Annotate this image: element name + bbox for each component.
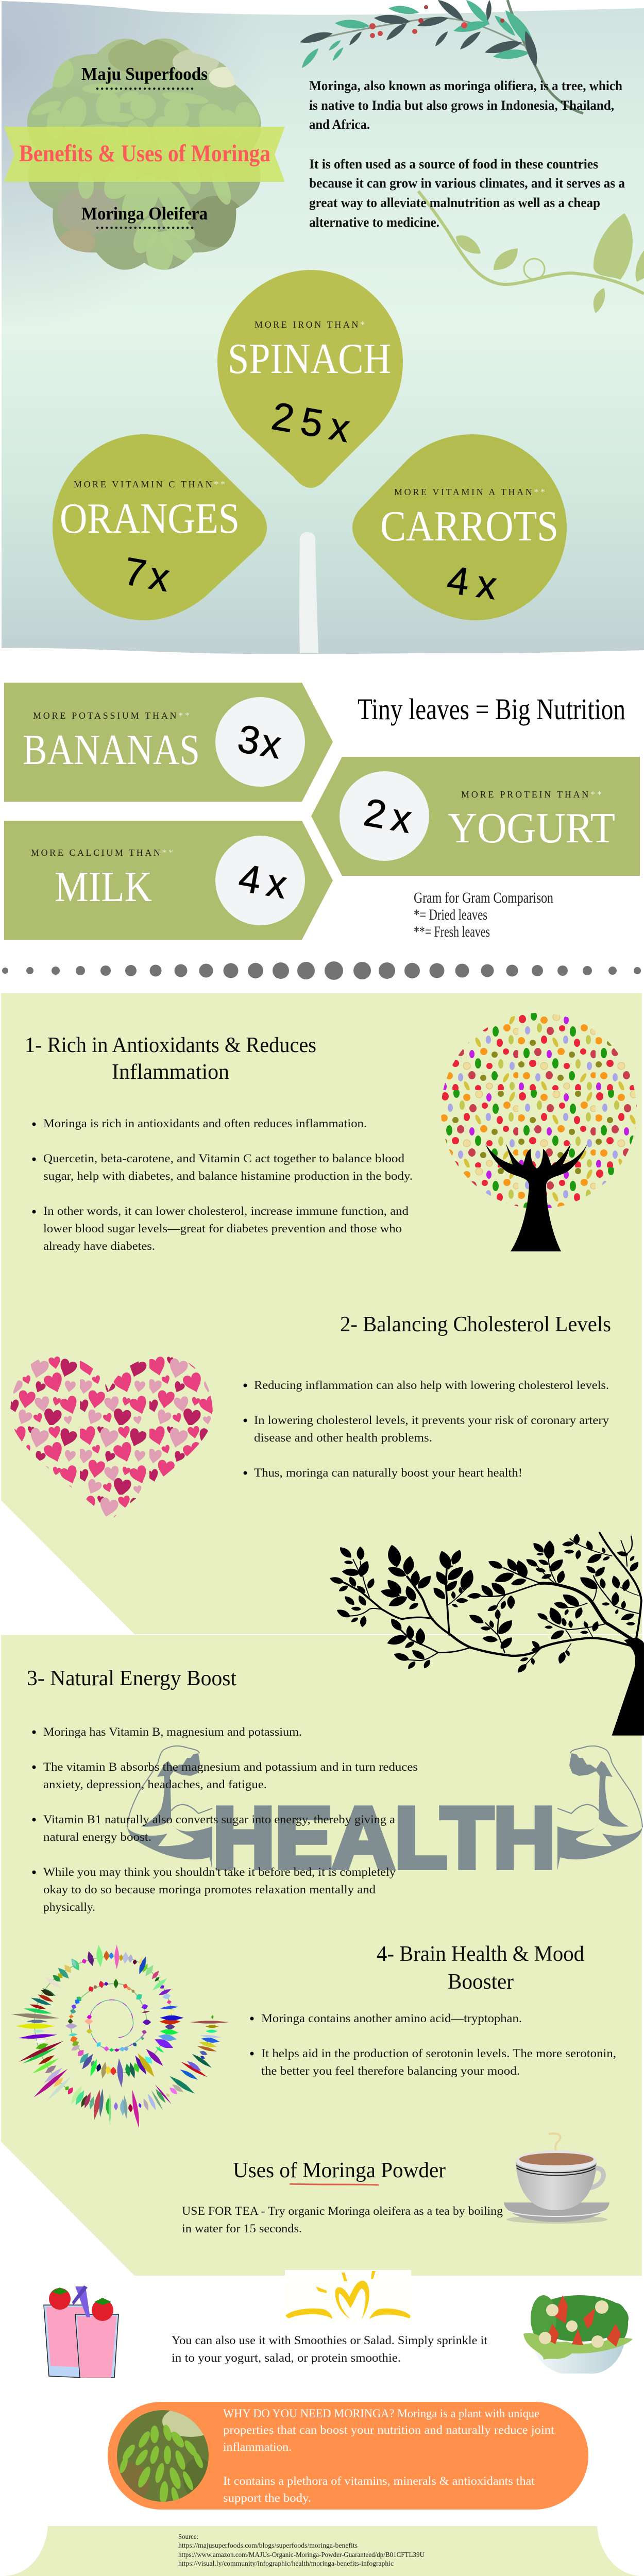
panel: hero background — [2, 1, 644, 654]
photo: moringa branch — [117, 2410, 209, 2502]
section 2 bullet list: In lowering cholesterol levels, it prevents your risk of coronary artery — [254, 1414, 609, 1427]
section 1 bullet list — [32, 1117, 413, 1252]
arrow card: milk — [4, 821, 333, 940]
section 2 bullet list: disease and other health problems. — [254, 1431, 432, 1444]
intro text — [309, 78, 625, 230]
icon: coffee cup — [504, 2133, 609, 2224]
section 3 bullet list: The vitamin B absorbs the magnesium and potassium and in turn reduces — [43, 1760, 418, 1773]
section 2 bullet list — [243, 1379, 609, 1479]
leaf: spinach — [217, 270, 403, 488]
leaf: spinach: MORE IRON THAN* — [255, 319, 365, 330]
arrow card: bananas: MORE POTASSIUM THAN** — [33, 710, 190, 721]
section 4 bullet list — [250, 2012, 616, 2077]
tea usage text: in water for 15 seconds. — [182, 2222, 302, 2235]
leaf: carrots — [352, 434, 567, 620]
section 4 bullet list: the better you feel therefore balancing your mood. — [261, 2064, 520, 2077]
callout text: inflammation. — [223, 2441, 292, 2453]
section 4 bullet list: It helps aid in the production of serotonin levels. The more serotonin, — [261, 2047, 616, 2060]
stem of clover — [299, 532, 318, 653]
section 1 bullet list: lower blood sugar levels—great for diabetes prevention and those who — [43, 1222, 402, 1235]
leaf: oranges: MORE VITAMIN C THAN** — [74, 479, 225, 489]
intro text: It is often used as a source of food in these countries — [309, 157, 598, 172]
callout text: It contains a plethora of vitamins, minerals & antioxidants that — [223, 2475, 535, 2487]
section 4 bullet list: Moringa contains another amino acid—tryptophan. — [261, 2012, 522, 2025]
footer: sources: https://visual.ly/community/infographic/health/moringa-benefits-infographic — [178, 2560, 394, 2568]
section 3 bullet list: physically. — [43, 1901, 95, 1913]
section 3 bullet list — [32, 1725, 418, 1913]
leaf: oranges: 7x — [121, 549, 173, 600]
section 4 heading — [377, 1942, 584, 1994]
arrow card: yogurt: YOGURT — [448, 804, 615, 852]
smoothie and salad usage text: in to your yogurt, salad, or protein smoothie. — [172, 2351, 401, 2364]
intro text: great way to alleviate malnutrition as well as a cheap — [309, 195, 600, 210]
intro text: and Africa. — [309, 117, 370, 132]
comparison legend: *= Dried leaves — [414, 906, 487, 923]
section 4 heading: 4- Brain Health & Mood — [377, 1942, 584, 1966]
arrow card: yogurt — [311, 757, 640, 876]
section 1 bullet list: In other words, it can lower cholesterol, increase immune function, and — [43, 1205, 409, 1217]
comparison legend: **= Fresh leaves — [414, 923, 490, 940]
section 1 heading — [25, 1033, 316, 1084]
callout text — [223, 2407, 555, 2504]
arrow card: milk: 4x — [235, 856, 290, 907]
panel: benefits 1 and 2 background — [1, 993, 642, 1634]
illustration: black tree silhouette — [329, 1533, 644, 1736]
leaf: spinach: SPINACH — [228, 335, 391, 383]
section 3 bullet list: While you may think you shouldn't take it before bed, it is completely — [43, 1866, 396, 1878]
callout text: support the body. — [223, 2492, 311, 2504]
section 2 bullet list: Thus, moringa can naturally boost your heart health! — [254, 1466, 522, 1479]
illustration: heart of hearts — [10, 1355, 213, 1520]
leaf: oranges — [53, 434, 267, 620]
arrow card: bananas: BANANAS — [23, 726, 200, 774]
section 3 bullet list: natural energy boost. — [43, 1831, 151, 1843]
arrow card: yogurt: MORE PROTEIN THAN** — [461, 789, 602, 800]
illustration: colourful spiral — [11, 1944, 229, 2129]
smoothie and salad usage text — [172, 2334, 488, 2364]
callout text: WHY DO YOU NEED MORINGA? Moringa is a plant with unique — [223, 2407, 539, 2420]
HEALTH wordmark: HEALTH — [213, 1789, 555, 1886]
intro text: Moringa, also known as moringa olifiera, is a tree, which — [309, 78, 623, 93]
illustration: fruit tree — [441, 1013, 637, 1251]
icon: smoothie glasses — [44, 2285, 118, 2378]
left flexed arm — [127, 1746, 212, 1870]
arrow card: yogurt: 2x — [361, 790, 415, 842]
section 1 bullet list: sugar, help with diabetes, and balance histamine production in the body. — [43, 1170, 413, 1182]
right flexed arm — [557, 1746, 642, 1870]
tea usage text: USE FOR TEA - Try organic Moringa oleifera as a tea by boiling — [182, 2205, 503, 2217]
tea usage text — [182, 2205, 503, 2235]
section 1 bullet list: already have diabetes. — [43, 1240, 155, 1252]
callout text: properties that can boost your nutrition and naturally reduce joint — [223, 2424, 555, 2436]
footer: sources: https://www.amazon.com/MAJUs-Organic-Moringa-Powder-Guaranteed/dp/B01CFTL39U — [178, 2551, 425, 2559]
section 2 bullet list: Reducing inflammation can also help with lowering cholesterol levels. — [254, 1379, 609, 1392]
logo: yellow sun heart — [285, 2270, 411, 2321]
main title: Benefits & Uses of Moringa — [19, 140, 270, 167]
leaf: carrots: 4x — [445, 558, 500, 608]
section 3 bullet list: Moringa has Vitamin B, magnesium and potassium. — [43, 1725, 302, 1738]
illustration: health arms and wordmark — [127, 1746, 642, 1886]
photo badge: moringa leaves — [27, 38, 262, 270]
intro text: alternative to medicine. — [309, 215, 439, 230]
comparison legend: Gram for Gram Comparison — [414, 889, 553, 906]
comparison legend — [414, 889, 553, 940]
arrow card: bananas — [4, 683, 333, 802]
arrow card: milk: MORE CALCIUM THAN** — [31, 848, 173, 858]
leaf: carrots: CARROTS — [380, 502, 558, 550]
footer: sources — [3, 2526, 642, 2576]
section 3 bullet list: Vitamin B1 naturally also converts sugar into energy, thereby giving a — [43, 1813, 395, 1826]
footer: sources: https://majusuperfoods.com/blogs/superfoods/moringa-benefits — [178, 2542, 358, 2550]
section 3 bullet list: okay to do so because moringa promotes relaxation mentally and — [43, 1883, 376, 1896]
intro text: because it can grow in various climates, and it serves as a — [309, 176, 625, 191]
section 3 heading: 3- Natural Energy Boost — [27, 1667, 236, 1690]
panel: benefits 3, 4 and uses background — [1, 1635, 642, 2276]
section 3 bullet list: anxiety, depression, headaches, and fatigue. — [43, 1778, 267, 1791]
leaf: spinach: 25x — [268, 394, 353, 451]
arrow card: bananas: 3x — [234, 717, 285, 767]
footer: sources: Source: — [178, 2533, 198, 2541]
section 1 heading: 1- Rich in Antioxidants & Reduces — [25, 1033, 316, 1057]
section 1 bullet list: Quercetin, beta-carotene, and Vitamin C act together to balance blood — [43, 1152, 405, 1165]
section 2 heading: 2- Balancing Cholesterol Levels — [340, 1313, 611, 1336]
section 1 bullet list: Moringa is rich in antioxidants and often reduces inflammation. — [43, 1117, 367, 1130]
uses heading with red underline: Uses of Moringa Powder — [233, 2159, 446, 2182]
leaf: carrots: MORE VITAMIN A THAN** — [394, 487, 545, 497]
arrow card: milk: MILK — [55, 863, 152, 911]
intro text: is native to India but also grows in Indonesia, Thailand, — [309, 98, 614, 113]
leaf: oranges: ORANGES — [60, 495, 240, 543]
illustration: decorative vine — [418, 191, 644, 313]
smoothie and salad usage text: You can also use it with Smoothies or Salad. Simply sprinkle it — [172, 2334, 488, 2347]
icon: salad bowl — [523, 2295, 633, 2374]
section 4 heading: Booster — [448, 1970, 514, 1994]
callout: why do you need moringa — [108, 2402, 588, 2510]
label: Moringa Oleifera: Moringa Oleifera — [81, 204, 208, 224]
ribbon banner — [4, 127, 285, 182]
brand label: Maju Superfoods: Maju Superfoods — [81, 64, 208, 84]
section 1 heading: Inflammation — [112, 1060, 229, 1084]
illustration: top branch with leaves and berries — [299, 0, 583, 113]
